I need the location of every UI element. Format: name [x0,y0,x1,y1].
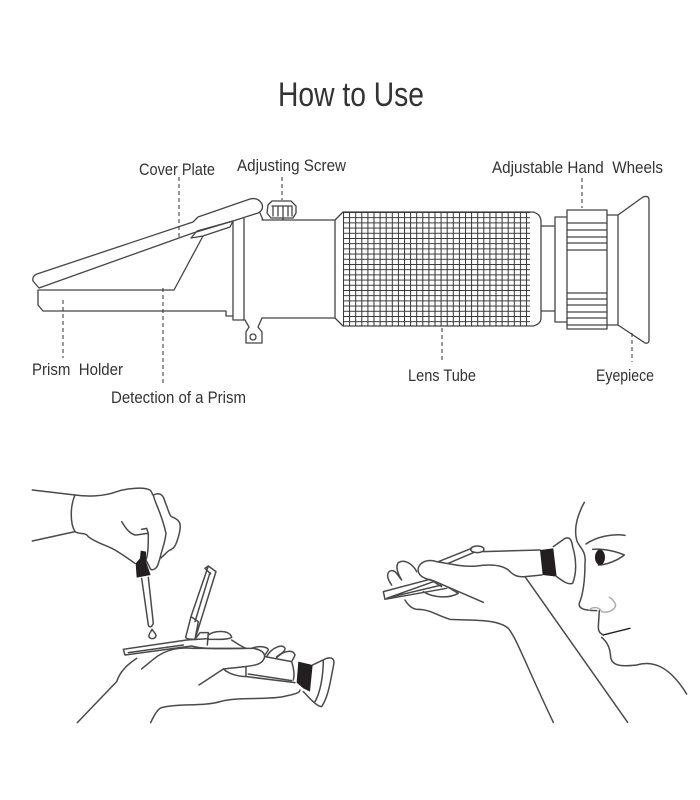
label: Adjusting Screw: Adjusting Screw [237,156,347,175]
eyepiece [607,196,649,343]
fingers [252,646,295,662]
refractometer with open cover [123,566,246,655]
eye [593,549,624,565]
eyepiece band [297,662,313,692]
label: Cover Plate: Cover Plate [139,160,215,179]
mounting hole [250,334,256,340]
adjusting screw [267,201,296,220]
prism cover plate [33,199,263,288]
lens tube [335,212,541,326]
title: How to Use [278,76,424,114]
dropper tube [142,577,153,627]
label: Prism Holder: Prism Holder [32,360,123,379]
leader lines [63,177,632,383]
upper hand with dropper [32,488,180,639]
label: Lens Tube: Lens Tube [408,366,476,385]
drop [149,629,156,639]
lower hand [77,646,300,723]
tube band [540,548,557,577]
detection prism [39,221,233,290]
label: Adjustable Hand Wheels: Adjustable Hand Wheels [492,158,663,177]
hand and arm [383,561,628,722]
illustration: applying a drop to the prism [32,488,334,723]
label: Eyepiece: Eyepiece [596,366,654,385]
refractometer diagram [33,196,649,343]
eyebrow [586,535,625,544]
adjustable hand wheels [541,210,607,329]
eyepiece [303,658,334,707]
face profile [576,502,687,694]
illustration: looking through the eyepiece [383,502,687,722]
refractometer at the eye [437,538,576,584]
prism holder and body [38,213,335,343]
label: Detection of a Prism: Detection of a Prism [111,388,246,407]
dropper bulb [136,551,151,578]
